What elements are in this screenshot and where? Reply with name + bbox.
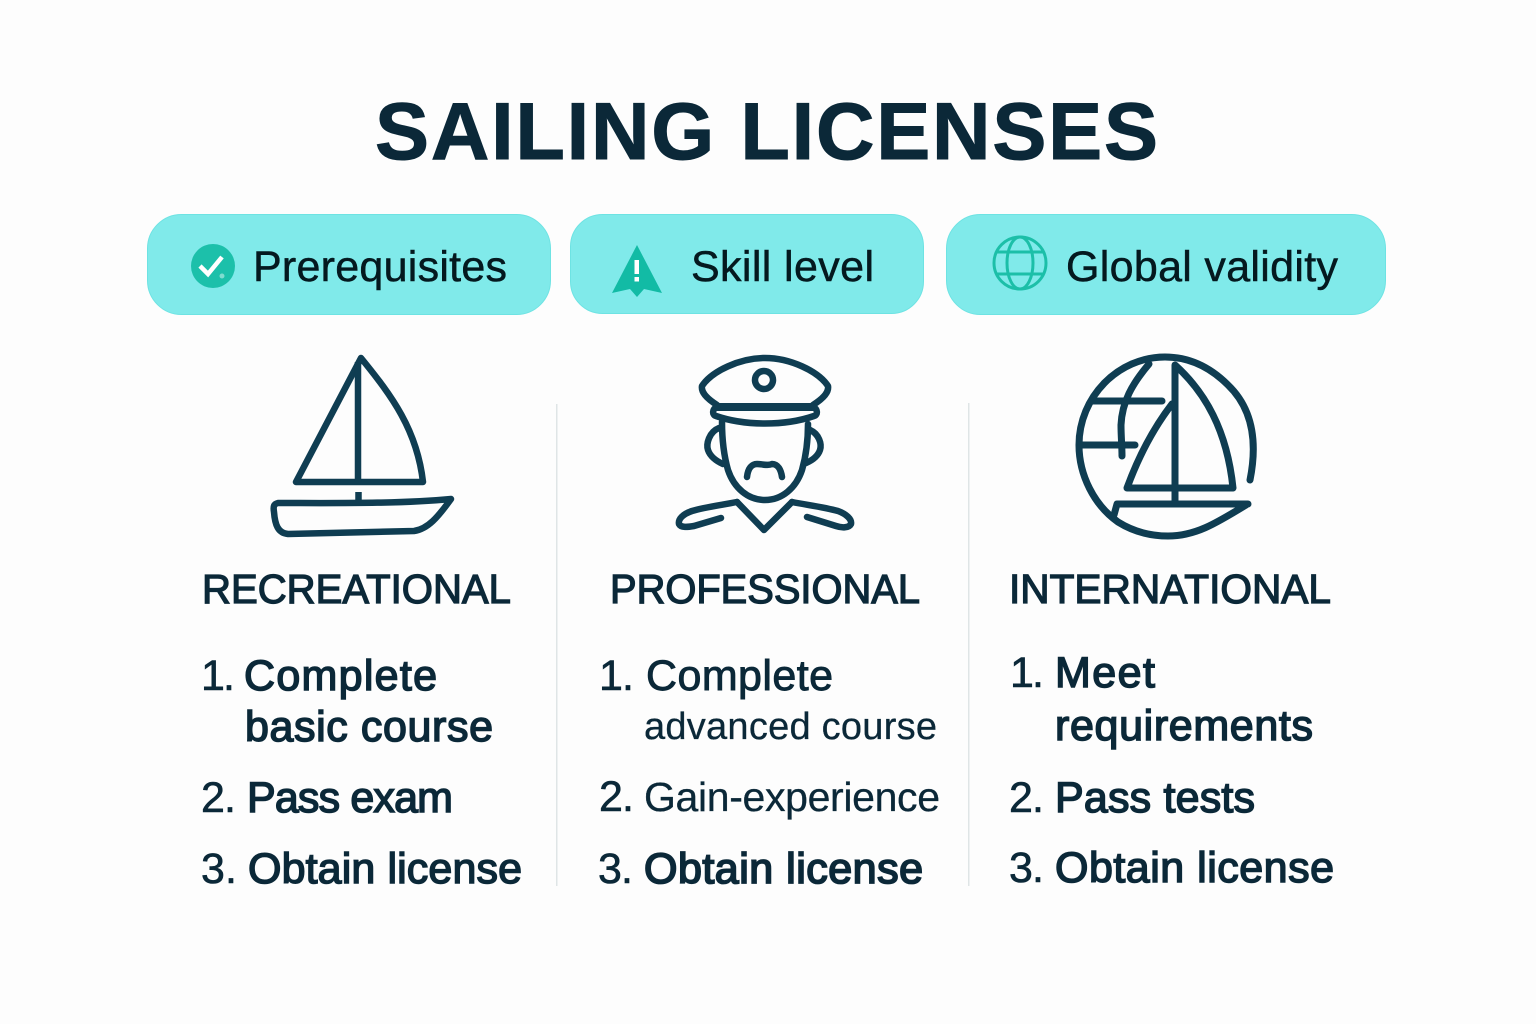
label: prerequisites: Prerequisites (253, 243, 507, 291)
list: professional steps: 2. (599, 773, 634, 821)
label: global validity: Global validity (1066, 243, 1338, 291)
list: international steps: Meet (1055, 649, 1155, 697)
icon: globe (994, 237, 1046, 289)
list: professional steps: 3. (598, 845, 633, 893)
panel: skill level pill (570, 214, 924, 314)
heading: international: INTERNATIONAL (1009, 566, 1331, 612)
heading: professional: PROFESSIONAL (610, 566, 920, 612)
list: international steps: 1. (1010, 649, 1044, 697)
icon: check circle (191, 244, 235, 288)
list: recreational steps: Obtain license (248, 845, 522, 893)
list: recreational steps: Pass exam (247, 774, 453, 822)
list: international steps: requirements (1055, 702, 1313, 750)
list: international steps: Obtain license (1055, 844, 1334, 892)
list: professional steps: Complete (646, 652, 833, 700)
list: recreational steps (201, 652, 522, 893)
list: international steps: 3. (1009, 844, 1044, 892)
list: international steps: 2. (1009, 774, 1044, 822)
list: recreational steps: 3. (201, 845, 237, 893)
icon: captain (679, 358, 851, 530)
list: recreational steps: Complete (244, 652, 437, 700)
column: professional (598, 358, 940, 893)
panel: global validity pill (946, 214, 1386, 314)
list: recreational steps: 1. (201, 652, 235, 700)
column: recreational (201, 358, 522, 893)
icon: warning triangle (612, 245, 662, 297)
list: international steps (1009, 649, 1334, 892)
icon: sailboat (274, 358, 451, 534)
title: SAILING LICENSES (375, 87, 1158, 177)
list: professional steps (598, 652, 940, 893)
list: professional steps: advanced course (644, 706, 937, 748)
panel: prerequisites pill (148, 214, 550, 314)
label: skill level: Skill level (691, 243, 874, 291)
list: recreational steps: basic course (245, 703, 493, 751)
list: professional steps: Gain-experience (644, 774, 940, 820)
column: international (1009, 357, 1334, 892)
heading: recreational: RECREATIONAL (202, 566, 511, 612)
list: professional steps: 1. (599, 652, 634, 700)
list: recreational steps: 2. (201, 774, 236, 822)
list: professional steps: Obtain license (644, 845, 923, 893)
icon: globe with sailboat (1079, 357, 1253, 536)
list: international steps: Pass tests (1055, 774, 1255, 822)
